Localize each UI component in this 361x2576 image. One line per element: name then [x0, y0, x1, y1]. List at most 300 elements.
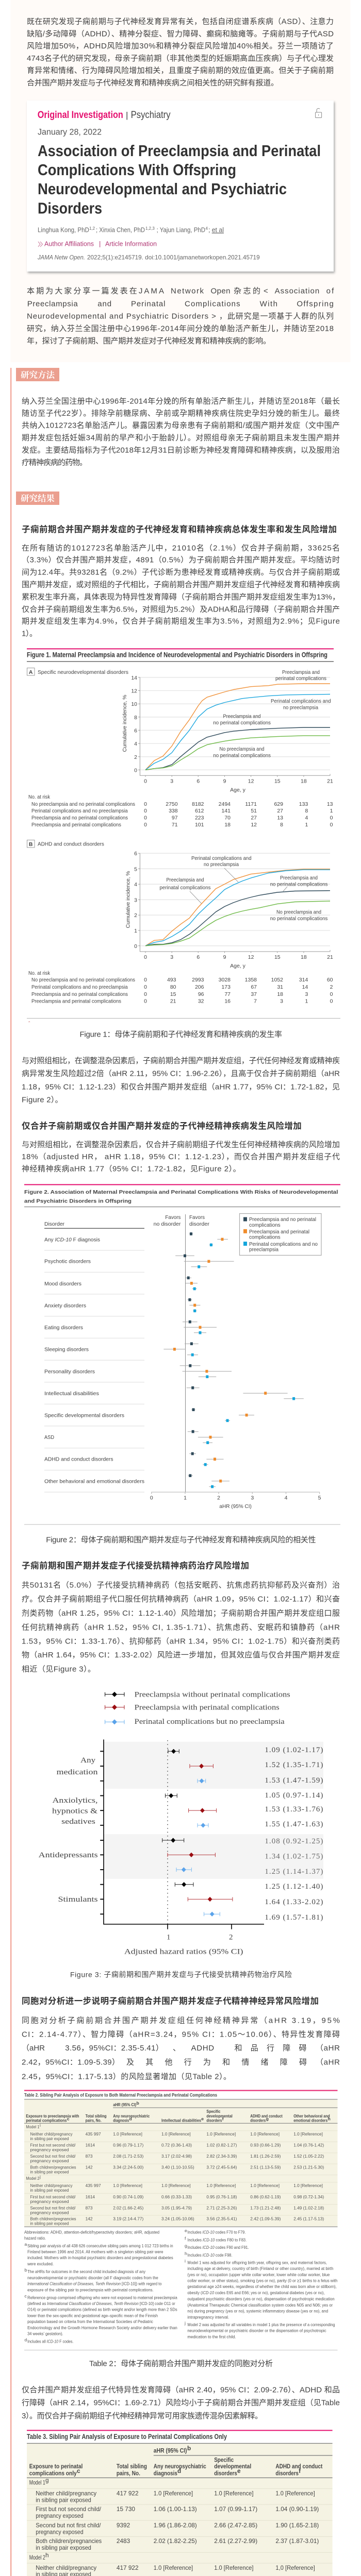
- table 2 body: 3.17 (2.02-4.98): [161, 2154, 192, 2159]
- table: number at risk B: 80: [170, 984, 176, 990]
- chart A: specific neurodevelopmental disorders: 14: [131, 675, 137, 681]
- table 2 body: 1.52 (1.05-2.22): [293, 2154, 324, 2159]
- chart B: ADHD and conduct disorders: 12: [248, 954, 254, 960]
- table 2 footnotes left: Endocrinology and the Growth Hormone Research Society and/or delivery earlier than: [27, 2325, 177, 2330]
- legend: Preeclampsia without perinatal complications: [135, 1691, 290, 1699]
- caption: table 2: Table 2：母体子痫前期合并围产期并发症的同胞对分析: [89, 2360, 273, 2368]
- table 2 body: 2.71 (2.25-3.26): [206, 2205, 237, 2210]
- table 3 header: Any neuropsychiatric: [154, 2463, 206, 2470]
- text: article overview paragraph: Offspring: [297, 299, 334, 308]
- article category: Psychiatry: [131, 110, 171, 121]
- category labels: Anxiolytics,: [53, 1797, 98, 1805]
- table: number at risk A: 141: [221, 808, 231, 814]
- chart A: specific neurodevelopmental disorders: 0: [144, 778, 147, 784]
- table 2 header: [26, 2100, 331, 2123]
- chart A: specific neurodevelopmental disorders: 6: [134, 727, 137, 734]
- table: number at risk B: 18: [277, 991, 283, 997]
- authors: et al: [212, 226, 224, 234]
- table: number at risk A: 0: [144, 808, 147, 814]
- text: overall incidence paragraph: 围产期并发症，或对照组的子代相比，子痫前期合并围产期并发症组子代神经发育和精神疾病: [22, 581, 340, 589]
- figure 2: forest plot: 5: [318, 1495, 321, 1501]
- text: perinatal only paragraph: 仅合并围产期并发症组子代特异性发育障碍（aHR 2.40，95% CI：2.09-2.76）、ADHD 和品: [22, 2385, 340, 2394]
- panel: article card: [27, 100, 334, 272]
- table 3 header: ADHD and conduct: [275, 2463, 322, 2470]
- row labels: Anxiety disorders: [44, 1302, 86, 1309]
- table 2 header: ADHD and conduct: [250, 2113, 283, 2119]
- table: number at risk A: 0: [330, 822, 333, 828]
- table 2 body: 3.40 (1.10-10.55): [161, 2165, 194, 2170]
- article title: Neurodevelopmental and Psychiatric: [38, 180, 287, 198]
- value labels: 1.53 (1.33-1.76): [265, 1805, 323, 1814]
- icon: open lock: [316, 108, 322, 117]
- table: number at risk A: 0: [144, 801, 147, 807]
- text: article overview paragraph: Neurodevelopmental and Psychiatric Disorders > ，此研究是一项基于人群的队列: [27, 312, 334, 320]
- table: number at risk B: 7: [254, 998, 257, 1005]
- table 2 header: aHR (95% CI): [113, 2102, 136, 2107]
- table 2 body: pregnancy exposed: [30, 2199, 69, 2204]
- article title: [38, 142, 321, 217]
- text: medication paragraph: 疗。仅合并子痫前期组子代口服任何抗精神病药（aHR 1.09，95% CI：1.02-1.17）和兴奋: [22, 1595, 340, 1603]
- chart A: specific neurodevelopmental disorders: Age, y: [230, 787, 246, 793]
- table 2 body: 0.72 (0.36-1.43): [161, 2143, 192, 2148]
- text: article overview paragraph: Complications: [185, 299, 240, 308]
- article links: [38, 240, 157, 248]
- category labels: Any: [80, 1756, 96, 1765]
- text: overall incidence paragraph: [22, 544, 340, 638]
- table 2 footnotes left: b: [25, 2267, 27, 2273]
- table: number at risk B: 67: [251, 984, 257, 990]
- row labels: Other behavioral and emotional disorders: [44, 1479, 144, 1485]
- table 2 footnotes left: lower than the sex-specific and gestational age–specific mean of the Finnish: [27, 2313, 158, 2318]
- chart A: specific neurodevelopmental disorders: 9: [223, 778, 226, 784]
- table 2 header: pairs, No.: [86, 2117, 102, 2123]
- table 3 body: 1.90 (1.65-2.18): [275, 2522, 319, 2529]
- table: number at risk A: Preeclampsia and no perinatal complications: [31, 815, 128, 821]
- chart B: ADHD and conduct disorders: 0: [144, 954, 147, 960]
- heading tag: methods: 研究方法: [21, 368, 56, 380]
- text: medication paragraph: 剂类药物（aHR 1.25，95% CI：1.12-1.40）风险增加；子痫前期合并围产期并发症组口服: [22, 1609, 340, 1618]
- text: intro paragraph: [27, 16, 334, 88]
- text: intro paragraph: 既在研究发现子痫前期与子代神经发育异常有关，包括自闭症谱系疾病（ASD）、注意力: [27, 16, 334, 26]
- table: number at risk B: 0: [330, 991, 333, 997]
- text: sibling analysis paragraph: 及 其 他 行 为 和 情 绪 障 碍: [126, 2058, 307, 2067]
- chart A: specific neurodevelopmental disorders: 12: [131, 688, 137, 694]
- legend: Preeclampsia and no perinatal: [249, 1216, 316, 1223]
- figure 2: forest plot: Favors: [189, 1214, 205, 1221]
- table 2 body: pregnancy exposed: [30, 2158, 69, 2163]
- table 3 body: 1.96 (1.86-2.08): [154, 2522, 197, 2529]
- value labels: 1.08 (0.92-1.25): [265, 1837, 323, 1845]
- table 2 body: Neither child/pregnancy: [30, 2131, 73, 2137]
- chart A: specific neurodevelopmental disorders: Specific neurodevelopmental disorders: [38, 669, 128, 675]
- category labels: Stimulants: [58, 1895, 98, 1904]
- text: article overview paragraph: With: [260, 299, 277, 308]
- figure 2: forest plot: [24, 1184, 340, 1524]
- table 2 body: 873: [86, 2154, 93, 2159]
- text: perinatal only paragraph: 3）。而仅合并子痫前期组子代神经精神异常可用家族遗传混杂因素解释。: [22, 2412, 262, 2420]
- table 2 header: c: [67, 2116, 70, 2122]
- table 3 body: 1.06 (1.00-1.13): [154, 2505, 197, 2513]
- table 3 header: Specific: [214, 2456, 234, 2464]
- chart A: specific neurodevelopmental disorders: 0: [134, 767, 137, 773]
- table 3 body: 1.0 [Reference]: [154, 2489, 193, 2497]
- table: number at risk A: 1171: [245, 801, 257, 807]
- table: number at risk B: No preeclampsia and no perinatal complications: [31, 977, 135, 983]
- table: number at risk B: 96: [198, 991, 204, 997]
- table 3 body: Model 1: [29, 2479, 45, 2486]
- table: number at risk A: 27: [277, 808, 283, 814]
- table: number at risk A: No. at risk: [28, 794, 51, 800]
- table 2 footnotes left: neurodevelopmental or psychiatric disorder (all F diagnostic codes from the: [27, 2275, 158, 2280]
- table: number at risk A: 27: [251, 815, 257, 821]
- table 3 body: in sibling pair exposed: [36, 2496, 91, 2503]
- chart B: ADHD and conduct disorders: 2: [134, 912, 137, 919]
- text: methods paragraph: 发症。主要结局指标为子代2018年12月31日前诊断为神经发育障碍和精神疾病，以及服用治: [22, 446, 340, 455]
- text: methods paragraph: 期并发症包括妊娠34周前的早产和小于胎龄儿）。对照组母亲无子痫前期且未发生围产期并: [22, 434, 340, 443]
- row labels: Sleeping disorders: [44, 1346, 89, 1352]
- text: combined exposure risk paragraph: [22, 1057, 340, 1105]
- value labels: 1.52 (1.35-1.71): [265, 1761, 323, 1769]
- text: article overview paragraph: of: [326, 286, 334, 296]
- table 2 body: pregnancy exposed: [30, 2210, 69, 2215]
- table 2 body: 2.42 (1.09-5.39): [250, 2216, 281, 2221]
- table 2 body: 2.08 (1.71-2.53): [113, 2154, 143, 2159]
- table: number at risk B: 3: [305, 991, 308, 997]
- legend: preeclampsia: [249, 1246, 278, 1252]
- table 2 header: Intellectual disabilities: [161, 2117, 201, 2123]
- table: number at risk A: 0: [144, 822, 147, 828]
- table 3 header: developmental: [214, 2463, 251, 2470]
- text: sibling analysis paragraph: 和 品 行 障 碍: [234, 2043, 306, 2053]
- chart A: specific neurodevelopmental disorders: no perinatal complications: [213, 752, 271, 758]
- figure 2: forest plot: aHR (95% CI): [219, 1503, 252, 1510]
- table 2 body: 435 997: [86, 2183, 101, 2188]
- article title: Complications With Offspring: [38, 161, 236, 179]
- legend: [239, 1214, 321, 1255]
- value labels: 1.05 (0.97-1.14): [265, 1791, 323, 1800]
- table 2 footnotes left: International Classification of Diseases, Tenth Revision [ICD-10]) with regard to: [27, 2281, 162, 2286]
- table 3 body: in sibling pair exposed: [36, 2544, 91, 2551]
- table 2 header: f: [222, 2116, 224, 2122]
- text: article overview paragraph: Network: [171, 286, 204, 296]
- text: methods paragraph: [22, 396, 340, 467]
- table 2 footnotes left: [24, 2229, 177, 2344]
- table 2 footnotes left: were excluded.: [27, 2261, 54, 2266]
- value labels: 1.55 (1.47-1.63): [265, 1820, 323, 1828]
- table 3 body: 1,0 [Reference]: [275, 2564, 315, 2571]
- article links: |: [99, 240, 101, 248]
- table 3 body: 9392: [117, 2522, 130, 2529]
- table 2 body: Both children/pregnancies: [30, 2216, 76, 2221]
- table: number at risk A: 8: [305, 808, 308, 814]
- table 3 header: [29, 2445, 322, 2477]
- figure 2: forest plot: 4: [285, 1495, 288, 1501]
- table 3 header: c: [77, 2467, 80, 2475]
- table 2 body: 2.45 (1.17-5.13): [293, 2216, 324, 2221]
- text: single exposure risk paragraph: 与对照组相比，在调整混杂因素后，仅合并子痫前期组子代发生任何神经精神疾病的风险增加: [22, 1141, 340, 1149]
- table: number at risk A: 18: [224, 822, 231, 828]
- table 3 header: Total sibling: [117, 2463, 147, 2470]
- chart A: specific neurodevelopmental disorders: 12: [248, 778, 254, 784]
- legend: Preeclampsia with perinatal complications: [135, 1703, 280, 1711]
- table 3 header: b: [187, 2445, 191, 2452]
- table 2 body: First but not second child/: [30, 2143, 76, 2148]
- legend: [105, 1691, 290, 1726]
- text: sibling analysis paragraph: CI：2.14-4.77）、智力障碍（aHR=3.24，95% CI：1.05～10.06）、特异性发育障碍: [22, 2029, 340, 2039]
- table 3 body: 2.02 (1.82-2.25): [154, 2537, 197, 2545]
- table: number at risk B: 1052: [271, 977, 283, 983]
- chart B: ADHD and conduct disorders: Age, y: [230, 963, 246, 969]
- chart B: ADHD and conduct disorders: 3: [170, 954, 173, 960]
- table: number at risk A: 223: [195, 815, 204, 821]
- table 2 footnotes left: O14) or perinatal complications (defined as birth weight and/or length more than 2 SDs: [27, 2307, 177, 2312]
- table 3 title: Table 3. Sibling Pair Analysis of Exposure to Perinatal Complications Only: [27, 2433, 227, 2441]
- table 2 footnotes right: obesity (ICD-10 codes E65 and E66; yes or no), gestational diabetes (yes or no),: [187, 2290, 324, 2295]
- chart B: ADHD and conduct disorders: Cumulative incidence, %: [125, 871, 131, 928]
- table 3 body: Model 2: [29, 2554, 45, 2561]
- table 2 header: e: [201, 2116, 204, 2122]
- text: article overview paragraph: Open: [210, 286, 230, 296]
- panel: introduction background: [10, 0, 351, 362]
- text: article overview paragraph: Association: [275, 286, 319, 296]
- chart B: ADHD and conduct disorders: 4: [134, 882, 137, 888]
- table: number at risk B: 3028: [219, 977, 231, 983]
- heading: medication risk: 子痫前期和围产期并发症子代接受抗精神病药治疗风险增加: [22, 1560, 249, 1570]
- table 2 body: 0.95 (0.76-1.18): [206, 2194, 237, 2199]
- table: number at risk B: 314: [299, 977, 308, 983]
- table 2 header: g: [266, 2116, 269, 2122]
- table: number at risk A: 8182: [192, 801, 204, 807]
- table 2 footnotes left: Sibling pair analysis of all 438 626 consecutive sibling pairs among 1 012 723 births in: [27, 2243, 173, 2248]
- text: overall incidence paragraph: （3.3%）仅合并围产期并发症，4891（0.5%）为子痫前期合并围产期并发症。平均随访时: [22, 556, 340, 565]
- table 2 body: 1.0 [Reference]: [293, 2131, 323, 2137]
- table: number at risk B: 0: [330, 998, 333, 1005]
- table: number at risk B: 493: [167, 977, 176, 983]
- figure 2: forest plot: Favors: [165, 1214, 180, 1221]
- table: number at risk B: 0: [144, 998, 147, 1005]
- table 2 header: Specific: [206, 2109, 221, 2114]
- chart B: ADHD and conduct disorders: 1: [134, 928, 137, 934]
- text: sibling analysis paragraph: （aHR: [316, 2044, 340, 2053]
- legend: complications: [249, 1222, 281, 1228]
- citation: 2022;5(1):e2145719. doi:10.1001/jamanetworkopen.2021.45719: [87, 253, 260, 261]
- chart A: specific neurodevelopmental disorders: 4: [134, 741, 137, 747]
- chart A: specific neurodevelopmental disorders: 18: [301, 778, 307, 784]
- chart A: specific neurodevelopmental disorders: Cumulative incidence, %: [122, 694, 128, 752]
- table 2 footnotes right: collar worker, or other status), smoking (yes or no), parity (0 or ≥1 births to a fetus with: [187, 2278, 338, 2283]
- table 2 footnotes left: The aHRs for outcomes in the second child included diagnosis of any: [27, 2269, 146, 2274]
- heading: sibling pair analysis: 同胞对分析进一步说明子痫前期合并围产期并发症子代精神神经异常风险增加: [22, 1996, 319, 2006]
- table 3 body: 1.0 [Reference]: [275, 2489, 315, 2497]
- table 3 body: Neither child/pregnancy: [36, 2489, 96, 2497]
- caption: figure 1: Figure 1：母体子痫前期和子代神经发育和精神疾病的发生率: [79, 1030, 282, 1039]
- table 2 body: 0.90 (0.74-1.09): [113, 2194, 143, 2199]
- table: number at risk B: 2: [330, 984, 333, 990]
- table: number at risk B: No. at risk: [28, 970, 51, 976]
- text: article overview paragraph: 本期为大家分享一篇发表在JAMA: [27, 286, 164, 296]
- table 2 body: 0.93 (0.66-1.29): [250, 2143, 281, 2148]
- table 2 body: 2.02 (1.66-2.45): [113, 2205, 143, 2210]
- text: methods paragraph: 疗精神疾病的药物。: [22, 459, 87, 467]
- figure 3: medication forest plot: [39, 1691, 323, 1956]
- table 2 body: Both children/pregnancies: [30, 2165, 76, 2170]
- table 3 header: d: [177, 2467, 181, 2475]
- chart B: ADHD and conduct disorders: 21: [327, 954, 333, 960]
- table 2 body: 2.82 (2.34-3.39): [206, 2154, 237, 2159]
- value labels: 1.53 (1.47-1.59): [265, 1776, 323, 1785]
- table 2 body: 0.66 (0.33-1.33): [161, 2194, 192, 2199]
- row labels: Psychotic disorders: [44, 1259, 91, 1265]
- table 2 body: j: [39, 2174, 41, 2179]
- table 2 body: 1.02 (0.82-1.27): [206, 2143, 237, 2148]
- table 3 body: 2.61 (2.27-2.99): [214, 2537, 257, 2545]
- table: number at risk B: 0: [144, 984, 147, 990]
- points: complications without preeclampsia: [191, 1245, 295, 1487]
- text: single exposure risk paragraph: 神经精神疾病aHR 1.77（95% CI：1.72-1.82，见Figure 2）。: [22, 1164, 241, 1174]
- table 2 footnotes left: exposure of the sibling pair to preeclampsia with perinatal complications.: [27, 2287, 154, 2292]
- table 2 footnotes right: intrapregnancy interval.: [187, 2314, 229, 2319]
- table 3 header: diagnosis: [154, 2470, 177, 2477]
- table: number at risk B: 14: [302, 984, 308, 990]
- table 2 footnotes right: (Anatomical Therapeutic Chemical classification system codes N05 and N06; yes or: [187, 2302, 333, 2308]
- text: sibling analysis paragraph: [22, 2016, 340, 2081]
- table 2 body: 2.53 (1.21-5.30): [293, 2165, 324, 2170]
- chart A: specific neurodevelopmental disorders: Perinatal complications and: [271, 698, 331, 704]
- chart B: ADHD and conduct disorders: 9: [223, 954, 226, 960]
- table 3 body: 2.37 (1.87-3.01): [275, 2537, 319, 2545]
- table 2 header: Any neuropsychiatric: [113, 2113, 150, 2119]
- table: number at risk A: 51: [251, 808, 257, 814]
- table 2 body: 873: [86, 2205, 93, 2210]
- authors: 4: [205, 226, 208, 231]
- chart B: ADHD and conduct disorders: 6: [196, 954, 200, 960]
- row labels: Personality disorders: [44, 1368, 95, 1375]
- table 2 footnotes right: medication to the first child.: [187, 2334, 236, 2339]
- table: number at risk A: 13: [277, 815, 283, 821]
- table: number at risk A: No preeclampsia and no perinatal complications: [31, 801, 135, 807]
- text: combined exposure risk paragraph: 与对照组相比，在调整混杂因素后，子痫前期合并围产期并发症组，子代任何神经发育或精神疾: [22, 1057, 340, 1065]
- table 2 body: in sibling pair exposed: [30, 2136, 69, 2141]
- text: article overview paragraph: <: [264, 286, 268, 296]
- table 2 header: disorders: [206, 2117, 222, 2123]
- chart B: ADHD and conduct disorders: perinatal complications: [160, 885, 210, 891]
- text: combined exposure risk paragraph: 1.18，95% CI：1.12-1.23）和仅合并围产期并发症组（aHR 1.77，95% CI：1.72-1.82，见: [22, 1082, 340, 1091]
- table: number at risk B: 3: [280, 998, 283, 1005]
- chart B: ADHD and conduct disorders: No preeclampsia and: [276, 909, 321, 916]
- table 2 body: 3.56 (2.35-5.41): [206, 2216, 237, 2221]
- text: combined exposure risk paragraph: 病异常发生风险超过2倍（aHR 2.11，95% CI：1.96-2.26），且高于仅合并子痫前期组（aHR: [22, 1070, 340, 1078]
- caption: figure 3: Figure 3: 子痫前期和围产期并发症与子代接受抗精神药物治疗风险: [70, 1970, 292, 1978]
- text: methods paragraph: 随访至子代22岁）。排除孕前糖尿病、孕前或孕期精神疾病住院史孕妇分娩的新生儿。最终: [22, 409, 340, 418]
- table: number at risk B: 2993: [192, 977, 204, 983]
- article links: Author Affiliations: [44, 240, 94, 248]
- table 2 body: 1614: [86, 2143, 95, 2148]
- table 2 body: 2.51 (1.13-5.59): [250, 2165, 281, 2170]
- table 3 header: disorders: [275, 2470, 299, 2477]
- table: number at risk B: [28, 970, 333, 1005]
- chart B: ADHD and conduct disorders: 5: [134, 866, 137, 872]
- table 3 body: 15 730: [117, 2505, 135, 2513]
- table: number at risk A: 629: [274, 801, 283, 807]
- table: number at risk A: Preeclampsia and perinatal complications: [31, 822, 121, 828]
- chart B: ADHD and conduct disorders: 3: [134, 897, 137, 903]
- table 2 body: 1.0 [Reference]: [113, 2131, 142, 2137]
- chart A: specific neurodevelopmental disorders: A: [29, 669, 33, 675]
- table 2 body: 1.81 (1.26-2.59): [250, 2154, 281, 2159]
- table 2 header: emotional disorders: [293, 2117, 327, 2123]
- authors: 1,2,3: [145, 226, 155, 231]
- table 3 body: g: [45, 2477, 49, 2484]
- table 2 header: Exposure to preeclampsia with: [26, 2113, 79, 2119]
- table 3 header: disorders: [214, 2470, 237, 2477]
- text: overall incidence paragraph: 期并发症组发生率为4.9%，仅合并子痫前期组发生率为3.5%，对照组为2.9%；见Figure: [22, 617, 340, 625]
- heading tag: results: 研究结果: [21, 492, 55, 504]
- chart B: ADHD and conduct disorders: B: [29, 841, 33, 848]
- text: overall incidence paragraph: 在所有随访的1012723名单胎活产儿中，21010名（2.1%）仅合并子痫前期，33625名: [22, 544, 340, 552]
- table 2 footnotes left: (defined as International Classification of Diseases, Tenth Revision [ICD-10] code O11 or: [27, 2301, 175, 2306]
- table 2 footnotes left: hazard ratio.: [24, 2235, 46, 2241]
- table 2 header: Other behavioral and: [293, 2113, 330, 2119]
- row labels: Mood disorders: [44, 1281, 81, 1287]
- table 2 body: Model 1: [26, 2124, 40, 2129]
- text: sibling analysis paragraph: 2.45，95%CI：1.17-5.13）的风险显著增加（见Table 2）。: [22, 2072, 231, 2081]
- table 2 header: diagnosis: [113, 2117, 129, 2123]
- text: article overview paragraph: Perinatal: [131, 299, 165, 308]
- text: medication paragraph: 共50131名（5.0%）子代接受抗精神病药（包括安眠药、抗焦虑药抗抑郁药及兴奋剂）治: [22, 1581, 340, 1590]
- chart A: specific neurodevelopmental disorders: Preeclampsia and: [282, 669, 320, 675]
- table 2 body: 1614: [86, 2194, 95, 2199]
- table 2 body: 1.0 [Reference]: [161, 2131, 191, 2137]
- text: sibling analysis paragraph: （aHR: [22, 2044, 45, 2053]
- table: number at risk B: 206: [195, 984, 204, 990]
- row labels: Eating disorders: [44, 1325, 83, 1331]
- table: number at risk B: 60: [327, 977, 333, 983]
- table 2 footnotes right: Model 1 was adjusted for offspring birth year, offspring sex, and maternal factors,: [187, 2260, 327, 2265]
- table 2 body: pregnancy exposed: [30, 2147, 69, 2153]
- row labels: ASD: [44, 1434, 54, 1440]
- table: number at risk B: 37: [251, 991, 257, 997]
- table: number at risk B: 32: [198, 998, 204, 1005]
- points: preeclampsia without complications: [184, 1234, 195, 1476]
- article date: January 28, 2022: [38, 127, 102, 137]
- table 2 footnotes left: 34 weeks' gestation).: [27, 2331, 63, 2336]
- table: number at risk B: 16: [224, 998, 231, 1005]
- text: article overview paragraph: 年，探讨了子痫前期、围产期并发症对子代神经发育和精神疾病的影响。: [27, 336, 271, 345]
- table 3 body: 1.04 (0.90-1.19): [275, 2505, 319, 2513]
- table: number at risk A: 1: [305, 822, 308, 828]
- table 2 body: 3.34 (2.24-5.00): [113, 2165, 143, 2170]
- table 2 header: disorders: [250, 2117, 266, 2123]
- table 3 body: First but not second child/: [36, 2505, 102, 2513]
- table 2 body: i: [40, 2123, 41, 2128]
- table 2 footnotes right: no) during pregnancy (yes or no), systemic inflammatory disease (yes or no), and: [187, 2308, 328, 2313]
- chart B: ADHD and conduct disorders: 0: [134, 943, 137, 950]
- table 3 body: Both children/pregnancies: [36, 2537, 102, 2545]
- text: article overview paragraph: 杂志的: [234, 286, 260, 296]
- table 2 body: 142: [86, 2165, 93, 2170]
- chart B: ADHD and conduct disorders: Perinatal complications and: [191, 855, 252, 861]
- table 3 header: Exposure to perinatal: [29, 2463, 83, 2470]
- table 3 header: complications only: [29, 2470, 77, 2477]
- table 2 body: 1.0 [Reference]: [293, 2183, 323, 2188]
- table 2 body: 3.72 (2.45-5.64): [206, 2165, 237, 2170]
- chart B: ADHD and conduct disorders: Preeclampsia and: [166, 877, 204, 883]
- table 2 body: 0.98 (0.72-1.34): [293, 2194, 324, 2199]
- table 3 body: 417 922: [117, 2564, 139, 2571]
- table 2 body: 1.04 (0.76-1.42): [293, 2143, 324, 2148]
- table 2 body: Model 2: [26, 2176, 40, 2181]
- table 2 footnotes left: d: [25, 2337, 27, 2342]
